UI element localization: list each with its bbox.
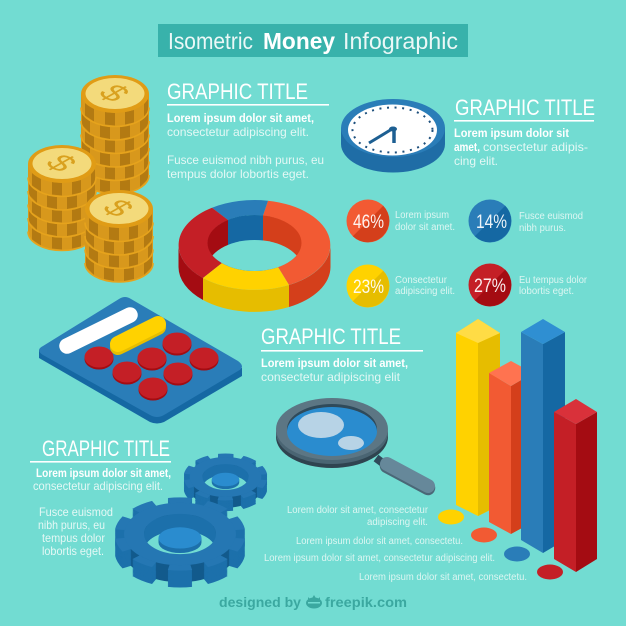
text block: lower left title: Lorem ipsum dolor sit amet,	[36, 466, 171, 480]
legend labels: Lorem ipsum dolor sit amet, consectetu.	[296, 536, 463, 547]
icon: clock	[341, 99, 445, 172]
stat: 46%	[346, 200, 390, 242]
icon: small gear	[177, 450, 274, 515]
stat label: 23%	[395, 275, 455, 297]
text block: lower left title: tempus dolor	[42, 531, 105, 545]
stat label: 27%: Eu tempus dolor	[519, 275, 588, 286]
footer credit: freepik.com	[325, 594, 407, 610]
calculator red keys	[84, 332, 218, 400]
text block: top right title: amet,	[454, 140, 480, 154]
text block: top left title	[167, 79, 329, 181]
stat: 46%: 46%	[353, 212, 384, 233]
text block: top right title	[454, 95, 595, 168]
text block: lower left title: GRAPHIC TITLE	[42, 436, 170, 461]
blue bar	[521, 319, 565, 553]
text block: top left title: consectetur adipiscing elit.	[167, 125, 309, 139]
stat: 27%	[468, 264, 512, 306]
title banner: Infographic	[343, 28, 458, 54]
text block: centre title: GRAPHIC TITLE	[261, 324, 401, 349]
icon: donut chart	[178, 200, 330, 312]
stat: 14%	[468, 200, 512, 242]
legend labels: Lorem ipsum dolor sit amet, consectetur adipiscing elit.	[264, 553, 495, 564]
title banner: Isometric	[168, 28, 253, 54]
text block: top right title: Lorem ipsum dolor sit	[454, 126, 569, 140]
stat label: 46%: Lorem ipsum	[395, 210, 449, 221]
left coin stack: $	[37, 150, 85, 177]
title banner	[158, 24, 468, 57]
front coin stack	[85, 190, 153, 282]
stat: 27%: 27%	[474, 276, 506, 297]
text block: top left title: Fusce euismod nibh purus, eu	[167, 153, 324, 167]
legend labels	[264, 505, 527, 583]
orange bar	[489, 361, 533, 534]
legend labels: adipiscing elit.	[367, 517, 428, 528]
stat label: 23%: Consectetur	[395, 275, 448, 286]
legend dots	[438, 510, 563, 580]
stat label: 46%: dolor sit amet.	[395, 222, 455, 233]
stat: 23%: 23%	[353, 277, 384, 298]
text block: lower left title: Fusce euismod	[39, 505, 113, 519]
text block: top right title: consectetur adipis-	[483, 140, 588, 154]
yellow bar	[456, 319, 500, 516]
text block: top left title: Lorem ipsum dolor sit amet,	[167, 111, 314, 125]
tall coin stack	[81, 75, 149, 194]
stat label: 14%: Fusce euismod	[519, 211, 583, 222]
text block: top left title: GRAPHIC TITLE	[167, 79, 308, 104]
left coin stack	[28, 145, 96, 250]
legend labels: Lorem ipsum dolor sit amet, consectetu.	[359, 572, 527, 583]
text block: lower left title: nibh purus, eu	[38, 518, 105, 532]
red bar	[554, 399, 597, 572]
calculator screen	[67, 315, 130, 346]
legend labels: Lorem dolor sit amet, consectetur	[287, 505, 429, 516]
text block: lower left title	[30, 436, 171, 558]
text block: top left title: tempus dolor lobortis eget.	[167, 167, 309, 181]
stat label: 46%	[395, 210, 455, 233]
stat label: 14%	[519, 211, 583, 234]
tall coin stack: $	[90, 80, 138, 107]
stat label: 23%: adipiscing elit.	[395, 286, 455, 297]
icon: calculator	[39, 297, 242, 424]
text block: centre title	[261, 324, 423, 384]
icon: freepik logo	[306, 595, 322, 608]
title banner: Money	[263, 28, 335, 54]
bar chart	[456, 319, 597, 572]
magnifier handle	[376, 458, 428, 488]
calculator yellow key	[118, 324, 158, 347]
stat: 23%	[346, 264, 390, 308]
stat label: 14%: nibh purus.	[519, 223, 566, 234]
footer credit: designed by	[219, 594, 301, 610]
stat: 14%: 14%	[476, 212, 507, 233]
front coin stack: $	[94, 195, 142, 222]
text block: lower left title: consectetur adipiscing elit.	[33, 479, 163, 493]
text block: lower left title: lobortis eget.	[42, 544, 104, 558]
icon: large gear	[104, 491, 256, 593]
stat label: 27%	[519, 275, 588, 297]
text block: centre title: Lorem ipsum dolor sit amet,	[261, 356, 408, 370]
icon: coin stacks	[28, 75, 153, 282]
footer credit	[219, 594, 407, 610]
icon: magnifying glass	[276, 398, 428, 488]
text block: top right title: cing elit.	[454, 154, 498, 168]
text block: centre title: consectetur adipiscing elit	[261, 370, 401, 384]
stat label: 27%: lobortis eget.	[519, 286, 574, 297]
text block: top right title: GRAPHIC TITLE	[455, 95, 595, 120]
